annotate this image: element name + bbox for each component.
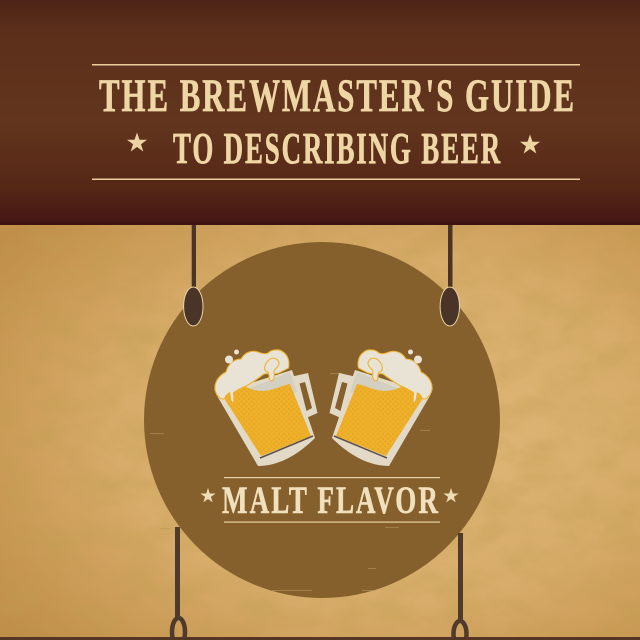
circular sign xyxy=(144,242,500,598)
hanging spoon: upper right xyxy=(440,224,459,326)
hanging spoon: upper left xyxy=(184,224,203,326)
icon: right beer mug xyxy=(330,350,432,466)
banner top rule xyxy=(92,64,580,66)
label bottom rule xyxy=(224,522,440,523)
panel: parchment background xyxy=(0,224,640,640)
panel: title banner xyxy=(0,0,640,225)
label top rule xyxy=(224,477,440,478)
star right xyxy=(520,134,540,154)
label star left xyxy=(200,488,216,502)
hanging hook: lower left xyxy=(172,527,185,640)
star left xyxy=(127,132,147,152)
lower panel edge xyxy=(0,637,640,640)
label star right xyxy=(443,488,459,502)
hanging hook: lower right xyxy=(454,533,466,640)
icon: left beer mug xyxy=(215,350,318,466)
label: malt flavor: MALT FLAVOR xyxy=(222,479,440,522)
banner bottom rule xyxy=(92,178,580,180)
